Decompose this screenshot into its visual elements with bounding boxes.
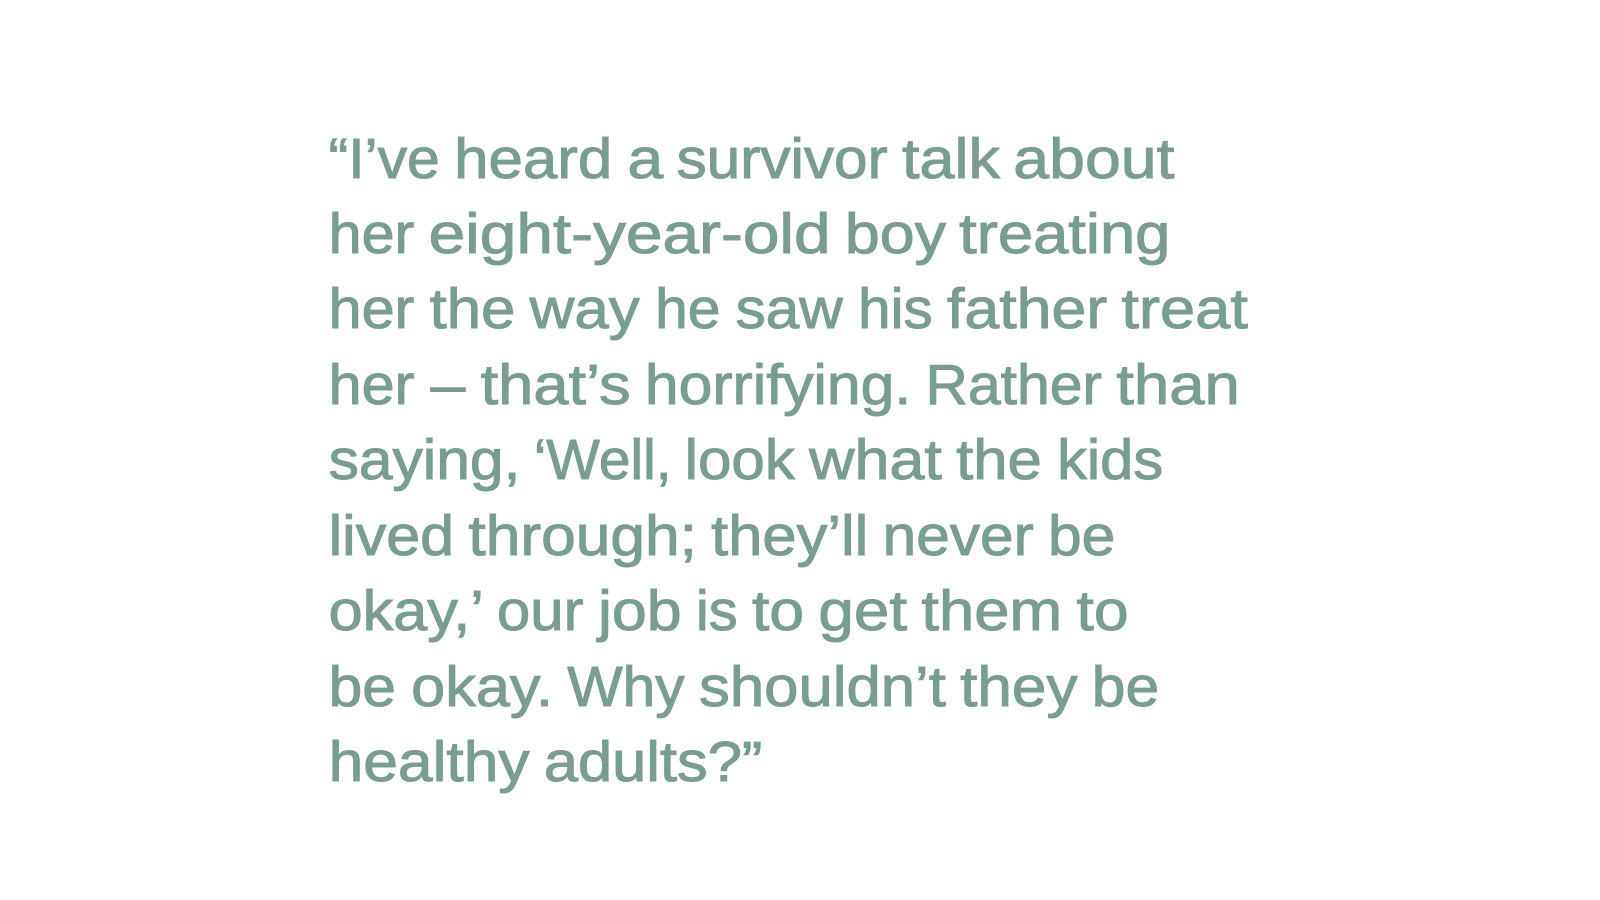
quote text block: lived: [329, 504, 454, 568]
quote text block: treating: [959, 202, 1170, 266]
quote text block: than: [1116, 353, 1240, 417]
quote text block: a: [628, 127, 664, 191]
quote text block: they’ll: [711, 504, 868, 568]
quote text block: adults?”: [544, 730, 762, 794]
quote text block: boy: [845, 202, 946, 266]
quote text block: shouldn’t: [699, 655, 946, 719]
quote text block: that’s: [481, 353, 631, 417]
quote text block: her: [329, 277, 414, 341]
quote text block: what: [808, 428, 942, 492]
quote text block: “I’ve: [329, 127, 440, 191]
quote text block: okay.: [411, 655, 553, 719]
quote text block: be: [1092, 655, 1159, 719]
quote text block: never: [883, 504, 1034, 568]
quote text block: her: [329, 353, 414, 417]
quote text block: ‘Well,: [534, 428, 672, 492]
quote text block: father: [947, 277, 1107, 341]
quote text block: to: [1076, 579, 1128, 643]
quote text block: kids: [1057, 428, 1163, 492]
quote text block: be: [1048, 504, 1115, 568]
quote text block: be: [329, 655, 396, 719]
quote text block: saw: [736, 277, 844, 341]
quote text block: is: [696, 579, 738, 643]
quote text block: his: [858, 277, 933, 341]
quote text block: Rather: [926, 353, 1102, 417]
quote text block: eight-year-old: [429, 202, 831, 266]
quote text block: them: [921, 579, 1062, 643]
quote text block: to: [752, 579, 804, 643]
quote text block: through;: [468, 504, 697, 568]
quote text block: saying,: [329, 428, 520, 492]
quote text block: they: [960, 655, 1078, 719]
quote text block: get: [818, 579, 907, 643]
quote text block: [329, 127, 1248, 794]
quote text block: heard: [454, 127, 612, 191]
quote text block: he: [655, 277, 720, 341]
quote text block: healthy: [329, 730, 530, 794]
quote text block: horrifying.: [645, 353, 911, 417]
quote text block: way: [529, 277, 640, 341]
quote text block: survivor: [676, 127, 888, 191]
quote text block: –: [431, 353, 466, 417]
quote text block: her: [329, 202, 414, 266]
quote text block: the: [956, 428, 1042, 492]
quote text block: treat: [1121, 277, 1248, 341]
quote text block: the: [430, 277, 515, 341]
quote text block: job: [596, 579, 682, 643]
quote text block: our: [497, 579, 584, 643]
quote text block: look: [685, 428, 795, 492]
quote text block: talk: [902, 127, 1001, 191]
quote text block: okay,’: [329, 579, 482, 643]
quote text block: about: [1013, 127, 1175, 191]
quote text block: Why: [567, 655, 685, 719]
